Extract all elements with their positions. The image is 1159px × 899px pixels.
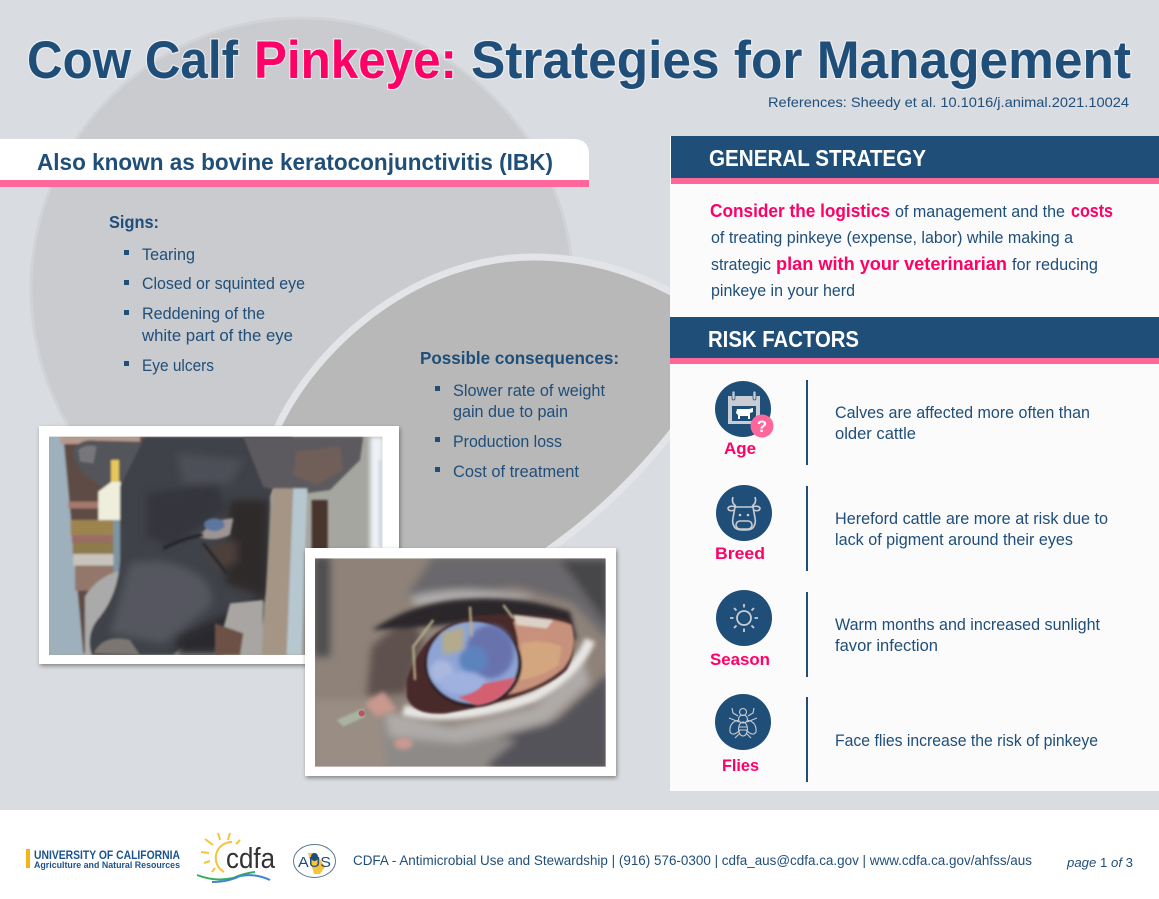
- footer: [0, 810, 1159, 899]
- risk factor: flies: Face flies increase the risk of pinkeye: [835, 732, 1098, 750]
- risk factor: season: favor infection: [835, 637, 938, 655]
- logo: cdfa: [197, 833, 276, 882]
- panel: signs: Eye ulcers: [142, 357, 214, 375]
- risk factor: breed: [715, 485, 1108, 571]
- risk factor: age: [715, 380, 1090, 465]
- header: general strategy: [671, 136, 1159, 184]
- text block: general strategy: of management and the: [895, 203, 1065, 221]
- banner: also known as: [0, 139, 589, 187]
- panel: signs: Tearing: [142, 246, 195, 264]
- decorative consequences shape: [276, 257, 700, 600]
- risk factor: flies: Flies: [722, 756, 759, 775]
- panel: signs: white part of the eye: [141, 327, 293, 345]
- title: Pinkeye:: [254, 31, 457, 90]
- header: general strategy: GENERAL STRATEGY: [709, 145, 926, 171]
- risk factor: age: Age: [724, 439, 756, 458]
- risk factor: breed: Breed: [715, 544, 765, 563]
- title: Cow Calf: [27, 31, 238, 90]
- risk factor: flies: [715, 694, 1098, 782]
- logo: cdfa: cdfa: [226, 843, 276, 875]
- title: [27, 31, 1131, 90]
- panel: possible consequences: Possible consequences:: [420, 348, 619, 368]
- references: References: Sheedy et al. 10.1016/j.animal.2021.10024: [768, 94, 1129, 110]
- header: risk factors: [670, 317, 1159, 364]
- icon: calendar with cow: ?: [757, 417, 767, 436]
- panel: signs: Reddening of the: [142, 305, 265, 323]
- logo: University of California: UNIVERSITY OF CALIFORNIA: [34, 850, 180, 862]
- logo: University of California: [26, 849, 180, 871]
- icon: sun: [716, 590, 772, 646]
- icon: calendar with cow: [715, 381, 774, 438]
- logo: University of California: Agriculture and Natural Resources: [34, 860, 180, 871]
- icon: cow head: [716, 485, 772, 541]
- header: risk factors: RISK FACTORS: [708, 326, 859, 352]
- panel: signs: [109, 212, 305, 375]
- risk factor: season: Warm months and increased sunlight: [835, 616, 1100, 634]
- panel: right column: [670, 136, 1159, 791]
- photo: cow with pinkeye: [39, 426, 399, 664]
- text block: general strategy: [710, 200, 1113, 300]
- risk factor: breed: lack of pigment around their eyes: [835, 531, 1073, 549]
- contact line: CDFA - Antimicrobial Use and Stewardship | (916) 576-0300 | cdfa_aus@cdfa.ca.gov | www.cdfa.ca.gov/ahfss/aus: [353, 853, 1032, 868]
- panel: possible consequences: Production loss: [453, 433, 562, 451]
- panel: signs: Closed or squinted eye: [142, 275, 305, 293]
- icon: fly: [715, 694, 771, 750]
- text block: general strategy: for reducing: [1012, 256, 1098, 274]
- panel: signs: Signs:: [109, 212, 159, 232]
- risk factor: breed: Hereford cattle are more at risk due to: [835, 510, 1108, 528]
- risk factor: season: Season: [710, 650, 770, 669]
- title: Strategies for Management: [471, 31, 1131, 90]
- text block: general strategy: strategic: [711, 256, 771, 274]
- text block: general strategy: plan with your veterinarian: [776, 253, 1007, 274]
- risk factor: season: [710, 590, 1100, 677]
- risk factor: age: Calves are affected more often than: [835, 404, 1090, 422]
- panel: possible consequences: Slower rate of weight: [453, 382, 605, 400]
- decorative large circle: [31, 18, 573, 560]
- text block: general strategy: of treating pinkeye (expense, labor) while making a: [711, 229, 1074, 247]
- text block: general strategy: Consider the logistics: [710, 200, 890, 221]
- risk factor: age: older cattle: [835, 425, 916, 443]
- panel: possible consequences: [420, 348, 619, 481]
- text block: general strategy: pinkeye in your herd: [711, 282, 855, 300]
- logo: AUS: AUS: [298, 854, 331, 871]
- photo: close-up of ulcerated eye: [305, 548, 616, 776]
- panel: possible consequences: gain due to pain: [453, 403, 568, 421]
- text block: general strategy: costs: [1071, 200, 1113, 221]
- page number: page 1 of 3: [1066, 855, 1133, 870]
- banner: also known as: Also known as bovine keratoconjunctivitis (IBK): [37, 149, 553, 175]
- panel: possible consequences: Cost of treatment: [453, 463, 579, 481]
- logo: AUS: [294, 844, 336, 878]
